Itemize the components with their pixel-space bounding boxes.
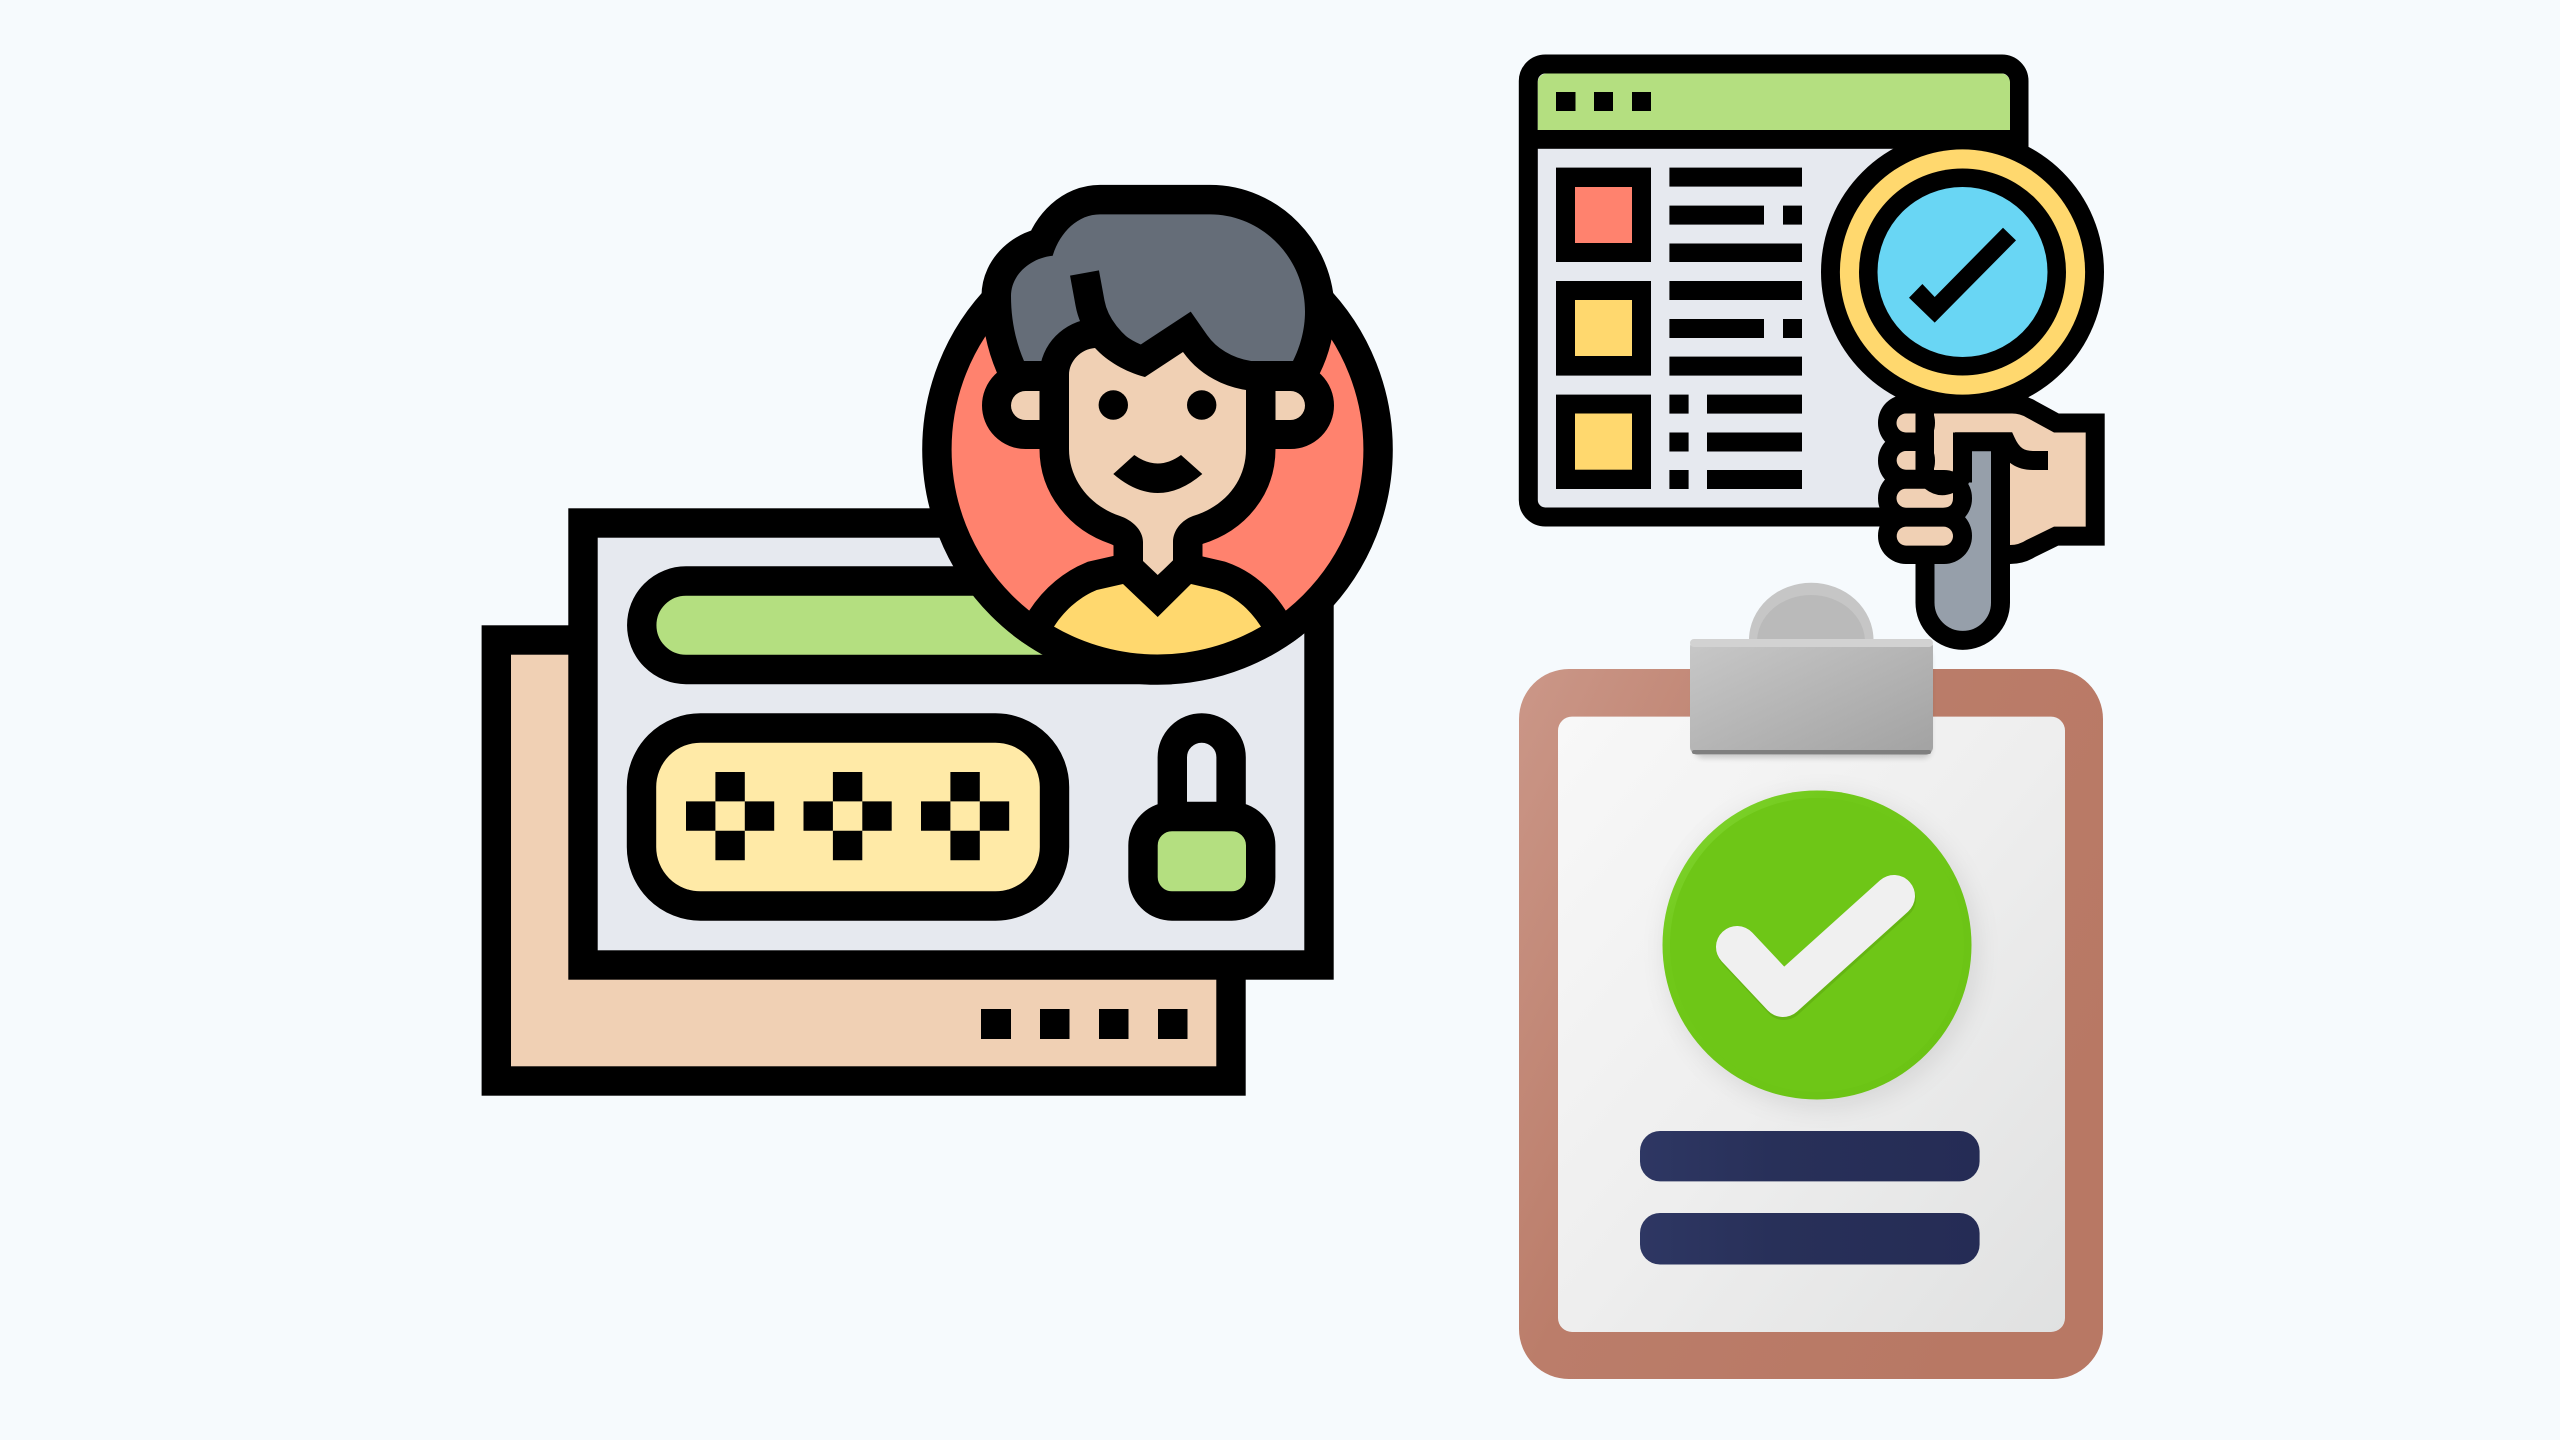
paper sheet [1558, 717, 2065, 1332]
clip knob [1749, 583, 1874, 642]
clipboard board [1519, 669, 2103, 1379]
icon: 3D clipboard [1519, 583, 2103, 1379]
list item 3 [1556, 395, 1802, 489]
back window [496, 640, 1231, 1081]
green check badge [1662, 790, 1975, 1105]
icon: user login [496, 214, 1378, 1081]
front window [583, 523, 1319, 965]
clip body [1690, 639, 1933, 758]
ears [1011, 391, 1305, 420]
password field [642, 728, 1054, 906]
text bars [1640, 1131, 1980, 1264]
mouth [1113, 455, 1202, 493]
hand holding handle [1878, 395, 2086, 640]
illustration canvas [482, 54, 2105, 1379]
list item 1 [1556, 168, 1802, 262]
list item 2 [1556, 281, 1802, 376]
face [1069, 348, 1246, 575]
hair strand [1084, 273, 1135, 362]
username field [642, 581, 1157, 670]
shirt [1054, 584, 1261, 654]
icon: checklist window with magnifier [1528, 64, 2104, 640]
browser window [1528, 64, 2019, 517]
hair [1011, 214, 1305, 361]
magnifier lens [1821, 130, 2104, 414]
avatar circle [937, 229, 1378, 670]
avatar [937, 214, 1378, 670]
icon: padlock [1143, 728, 1261, 906]
eyes [1099, 390, 1216, 420]
